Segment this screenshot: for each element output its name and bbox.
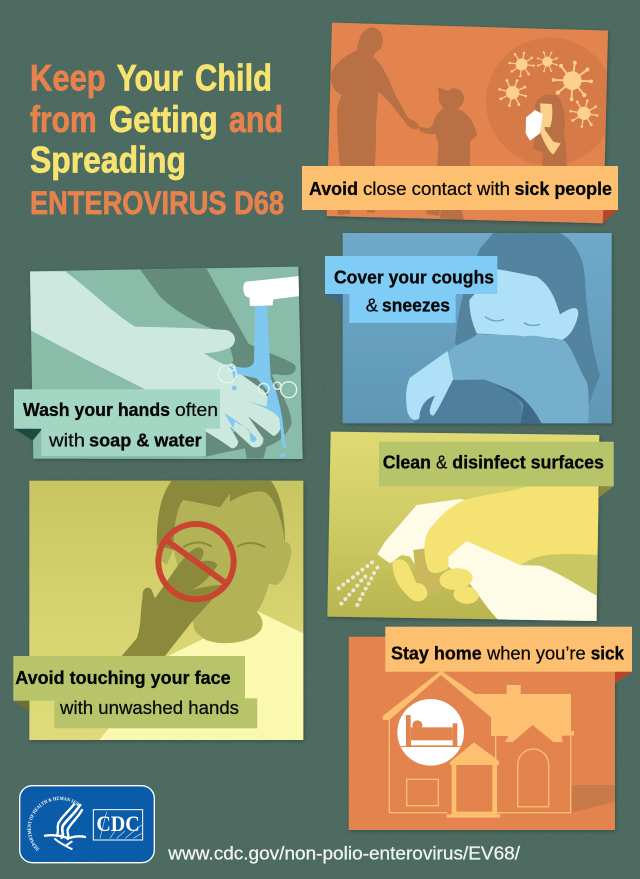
panel: cover coughs: [325, 233, 612, 423]
label fold: [14, 429, 41, 441]
illustration: child silhouette: [419, 87, 477, 167]
label: avoid touching face: with unwashed hands: [59, 697, 239, 718]
label fold: [13, 701, 29, 712]
label: clean surfaces: Clean: [383, 451, 431, 472]
illustration: back hand: [140, 269, 296, 459]
illustration: body: [413, 380, 522, 423]
label: avoid close contact: [302, 166, 618, 210]
title: [30, 57, 284, 221]
illustration: spray droplets: [337, 560, 379, 607]
icon: HHS seal text: DEPARTMENT OF HEALTH & HUMAN SERVICES·USA: [28, 796, 82, 852]
label: avoid close contact: close contact with: [363, 178, 510, 199]
panel: stay home: [349, 637, 633, 830]
label: wash hands: with: [48, 430, 85, 451]
illustration: viruses: [498, 51, 598, 128]
label: stay home: [385, 627, 632, 672]
label: stay home: sick: [591, 642, 625, 663]
label fold: [615, 672, 633, 683]
icon: bed in circle: [397, 699, 464, 766]
label: avoid close contact: sick people: [514, 178, 612, 199]
icon: CDC box: CDC: [96, 811, 140, 836]
label: cover coughs: [325, 256, 497, 323]
illustration: shirt: [99, 612, 303, 740]
illustration: sleeve shade: [544, 566, 597, 594]
label: cover coughs: Cover your coughs: [334, 266, 494, 287]
title: Keep: [30, 57, 106, 99]
illustration: roof: [383, 671, 574, 742]
title: Your: [117, 57, 183, 99]
illustration: face: [469, 269, 578, 340]
panel: clean surfaces: [327, 432, 614, 622]
illustration: water: [230, 305, 286, 448]
label: clean surfaces: disinfect surfaces: [452, 451, 604, 472]
logo: HHS and CDC: [19, 785, 155, 864]
label: clean surfaces: &: [436, 451, 448, 472]
illustration: house walls: [389, 720, 571, 813]
illustration: faucet: [243, 276, 300, 306]
illustration: face: [173, 491, 291, 643]
illustration: fingers: [392, 559, 480, 605]
title: and: [229, 98, 283, 140]
illustration: hair: [157, 481, 285, 550]
icon: prohibition sign: [158, 524, 234, 599]
label fold: [599, 486, 614, 498]
label: avoid close contact: Avoid: [309, 178, 358, 199]
title: Getting: [109, 98, 218, 140]
panel: wash hands: [14, 267, 303, 459]
illustration: bottle: [448, 541, 597, 622]
illustration: sick person circle: [486, 38, 614, 166]
illustration: bottle neck shade: [413, 548, 443, 595]
illustration: eyebrows: [183, 542, 265, 547]
illustration: hand: [406, 351, 453, 420]
label: wash hands: soap & water: [89, 430, 202, 451]
label: wash hands: Wash your hands: [23, 399, 170, 420]
illustration: porch: [447, 742, 500, 818]
illustration: feet: [337, 210, 464, 220]
label: stay home: when you’re: [486, 642, 586, 663]
panel: avoid touching face: [13, 481, 303, 740]
title: from: [30, 98, 97, 140]
illustration: eyes: [485, 317, 540, 325]
label: cover coughs: &: [366, 295, 379, 316]
label fold: [325, 294, 343, 305]
label: cover coughs: sneezes: [382, 295, 450, 316]
label: wash hands: [14, 389, 220, 456]
title: Child: [195, 57, 272, 99]
illustration: house shadow: [572, 785, 615, 813]
illustration: front hand: [30, 271, 281, 448]
label fold: [603, 210, 618, 223]
illustration: hair: [455, 233, 600, 405]
title: ENTEROVIRUS D68: [30, 185, 284, 221]
website url: www.cdc.gov/non-polio-enterovirus/EV68/: [167, 842, 521, 863]
label: stay home: Stay home: [391, 642, 482, 663]
label: clean surfaces: [379, 442, 614, 486]
label: avoid touching face: Avoid touching your face: [15, 667, 231, 688]
illustration: spray head: [377, 499, 465, 565]
icon: eagle: [45, 804, 85, 849]
label: avoid touching face: [13, 656, 257, 728]
label: wash hands: often: [175, 399, 218, 420]
illustration: adult silhouette: [331, 27, 419, 167]
illustration: hand: [424, 487, 600, 573]
illustration: hand: [122, 547, 223, 656]
title: Spreading: [30, 139, 186, 181]
illustration: sneezing woman: [526, 94, 567, 167]
panel: avoid close contact: [327, 23, 618, 223]
illustration: sleeve: [448, 333, 589, 423]
illustration: bubbles and drops: [218, 364, 297, 398]
